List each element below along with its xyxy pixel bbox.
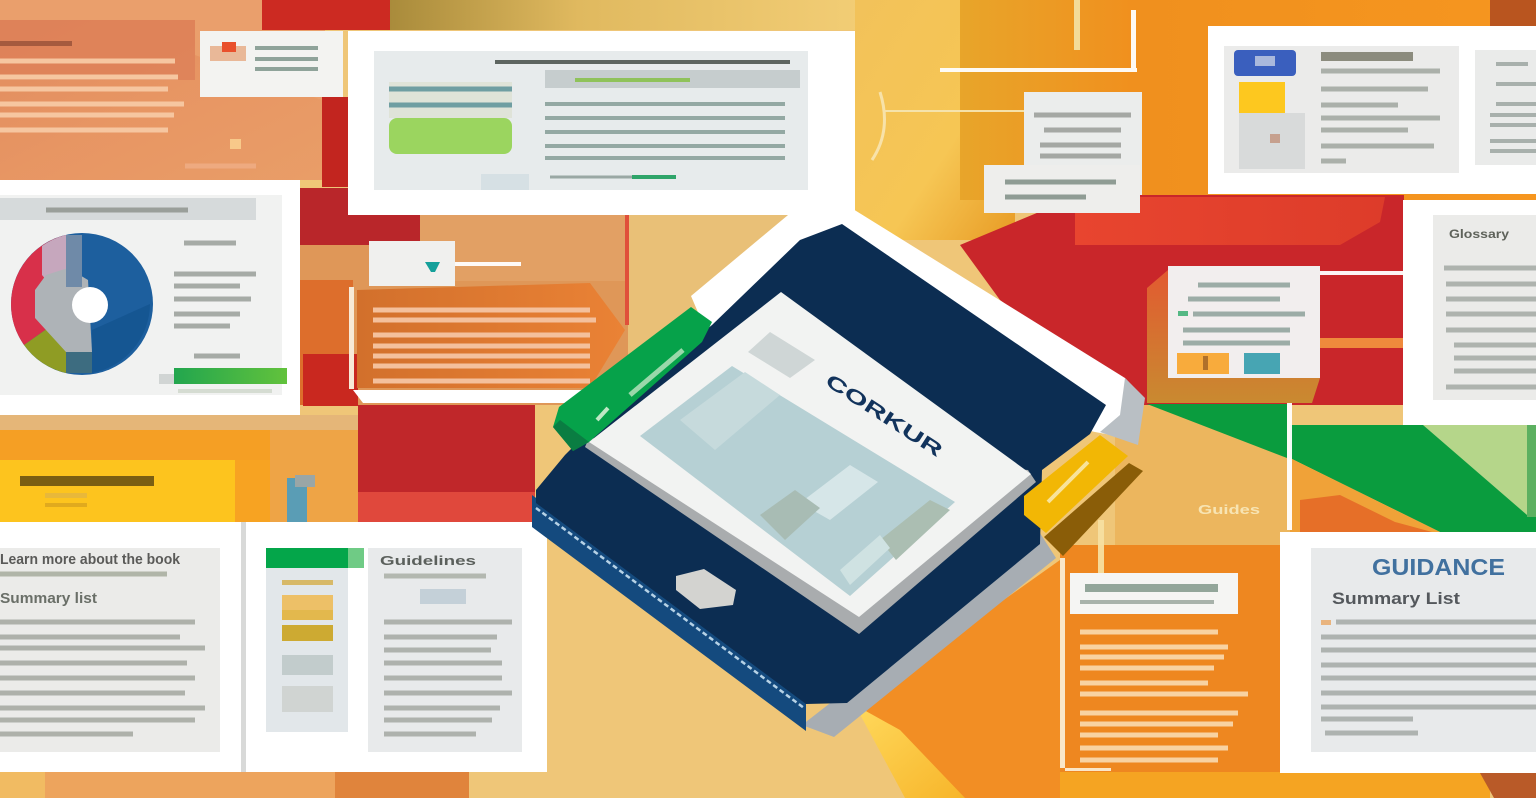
green tab <box>553 307 712 451</box>
panel: small callout cards <box>984 92 1142 213</box>
panel: small logo card <box>200 31 343 97</box>
heading <box>0 551 181 607</box>
heading and text lines <box>495 62 800 177</box>
screen tile <box>748 332 815 378</box>
chart title <box>0 198 256 220</box>
panel: orange arrow text panel <box>349 283 625 403</box>
navy lower bezel edge <box>532 495 806 731</box>
connector lines: Guides <box>1198 502 1260 517</box>
yellow tab <box>1024 435 1143 556</box>
body lines <box>1080 632 1248 760</box>
text block: top-left salmon panel <box>0 20 322 180</box>
buttons <box>1177 353 1280 374</box>
grey underside of screen <box>585 438 1036 634</box>
panel: small teal label card <box>369 241 455 286</box>
panel: bottom-left article card <box>0 522 241 772</box>
panel: orange text card <box>1060 558 1248 771</box>
heading: Learn more about the book <box>0 551 181 568</box>
panel: top centre card <box>348 31 855 215</box>
panel: right side list card: Glossary <box>1449 227 1509 241</box>
heading: Summary list <box>0 590 97 607</box>
left form block <box>389 82 529 190</box>
white and grey rim <box>691 196 1145 737</box>
legend text <box>159 243 287 391</box>
panel: top-right card <box>1208 26 1536 194</box>
text column: Guidelines <box>380 553 476 568</box>
label box <box>1070 573 1238 614</box>
panel: right side list card <box>1403 200 1536 425</box>
text column <box>380 553 512 734</box>
screen content <box>640 366 955 596</box>
green header and stacked column <box>266 548 364 732</box>
text lines <box>1321 52 1536 161</box>
heading: GUIDANCE <box>1372 554 1505 580</box>
screen <box>589 292 1031 617</box>
subheading: Summary List <box>1332 589 1460 608</box>
body text <box>0 622 205 734</box>
donut chart <box>11 233 153 375</box>
home button <box>676 569 736 609</box>
connector lines <box>455 0 1404 575</box>
panel: donut chart card <box>0 180 300 415</box>
navy body <box>536 224 1106 704</box>
body lines <box>1321 622 1536 733</box>
panel: bottom-centre card with chart <box>241 522 547 772</box>
panel: bottom-right card <box>1280 532 1536 773</box>
screen title: CORKUR <box>821 371 946 462</box>
panel: mid-right card with buttons <box>1147 266 1404 403</box>
label: yellow panel heading <box>20 476 154 507</box>
colour tabs <box>1234 50 1305 169</box>
illustration: tablet device <box>532 196 1145 737</box>
